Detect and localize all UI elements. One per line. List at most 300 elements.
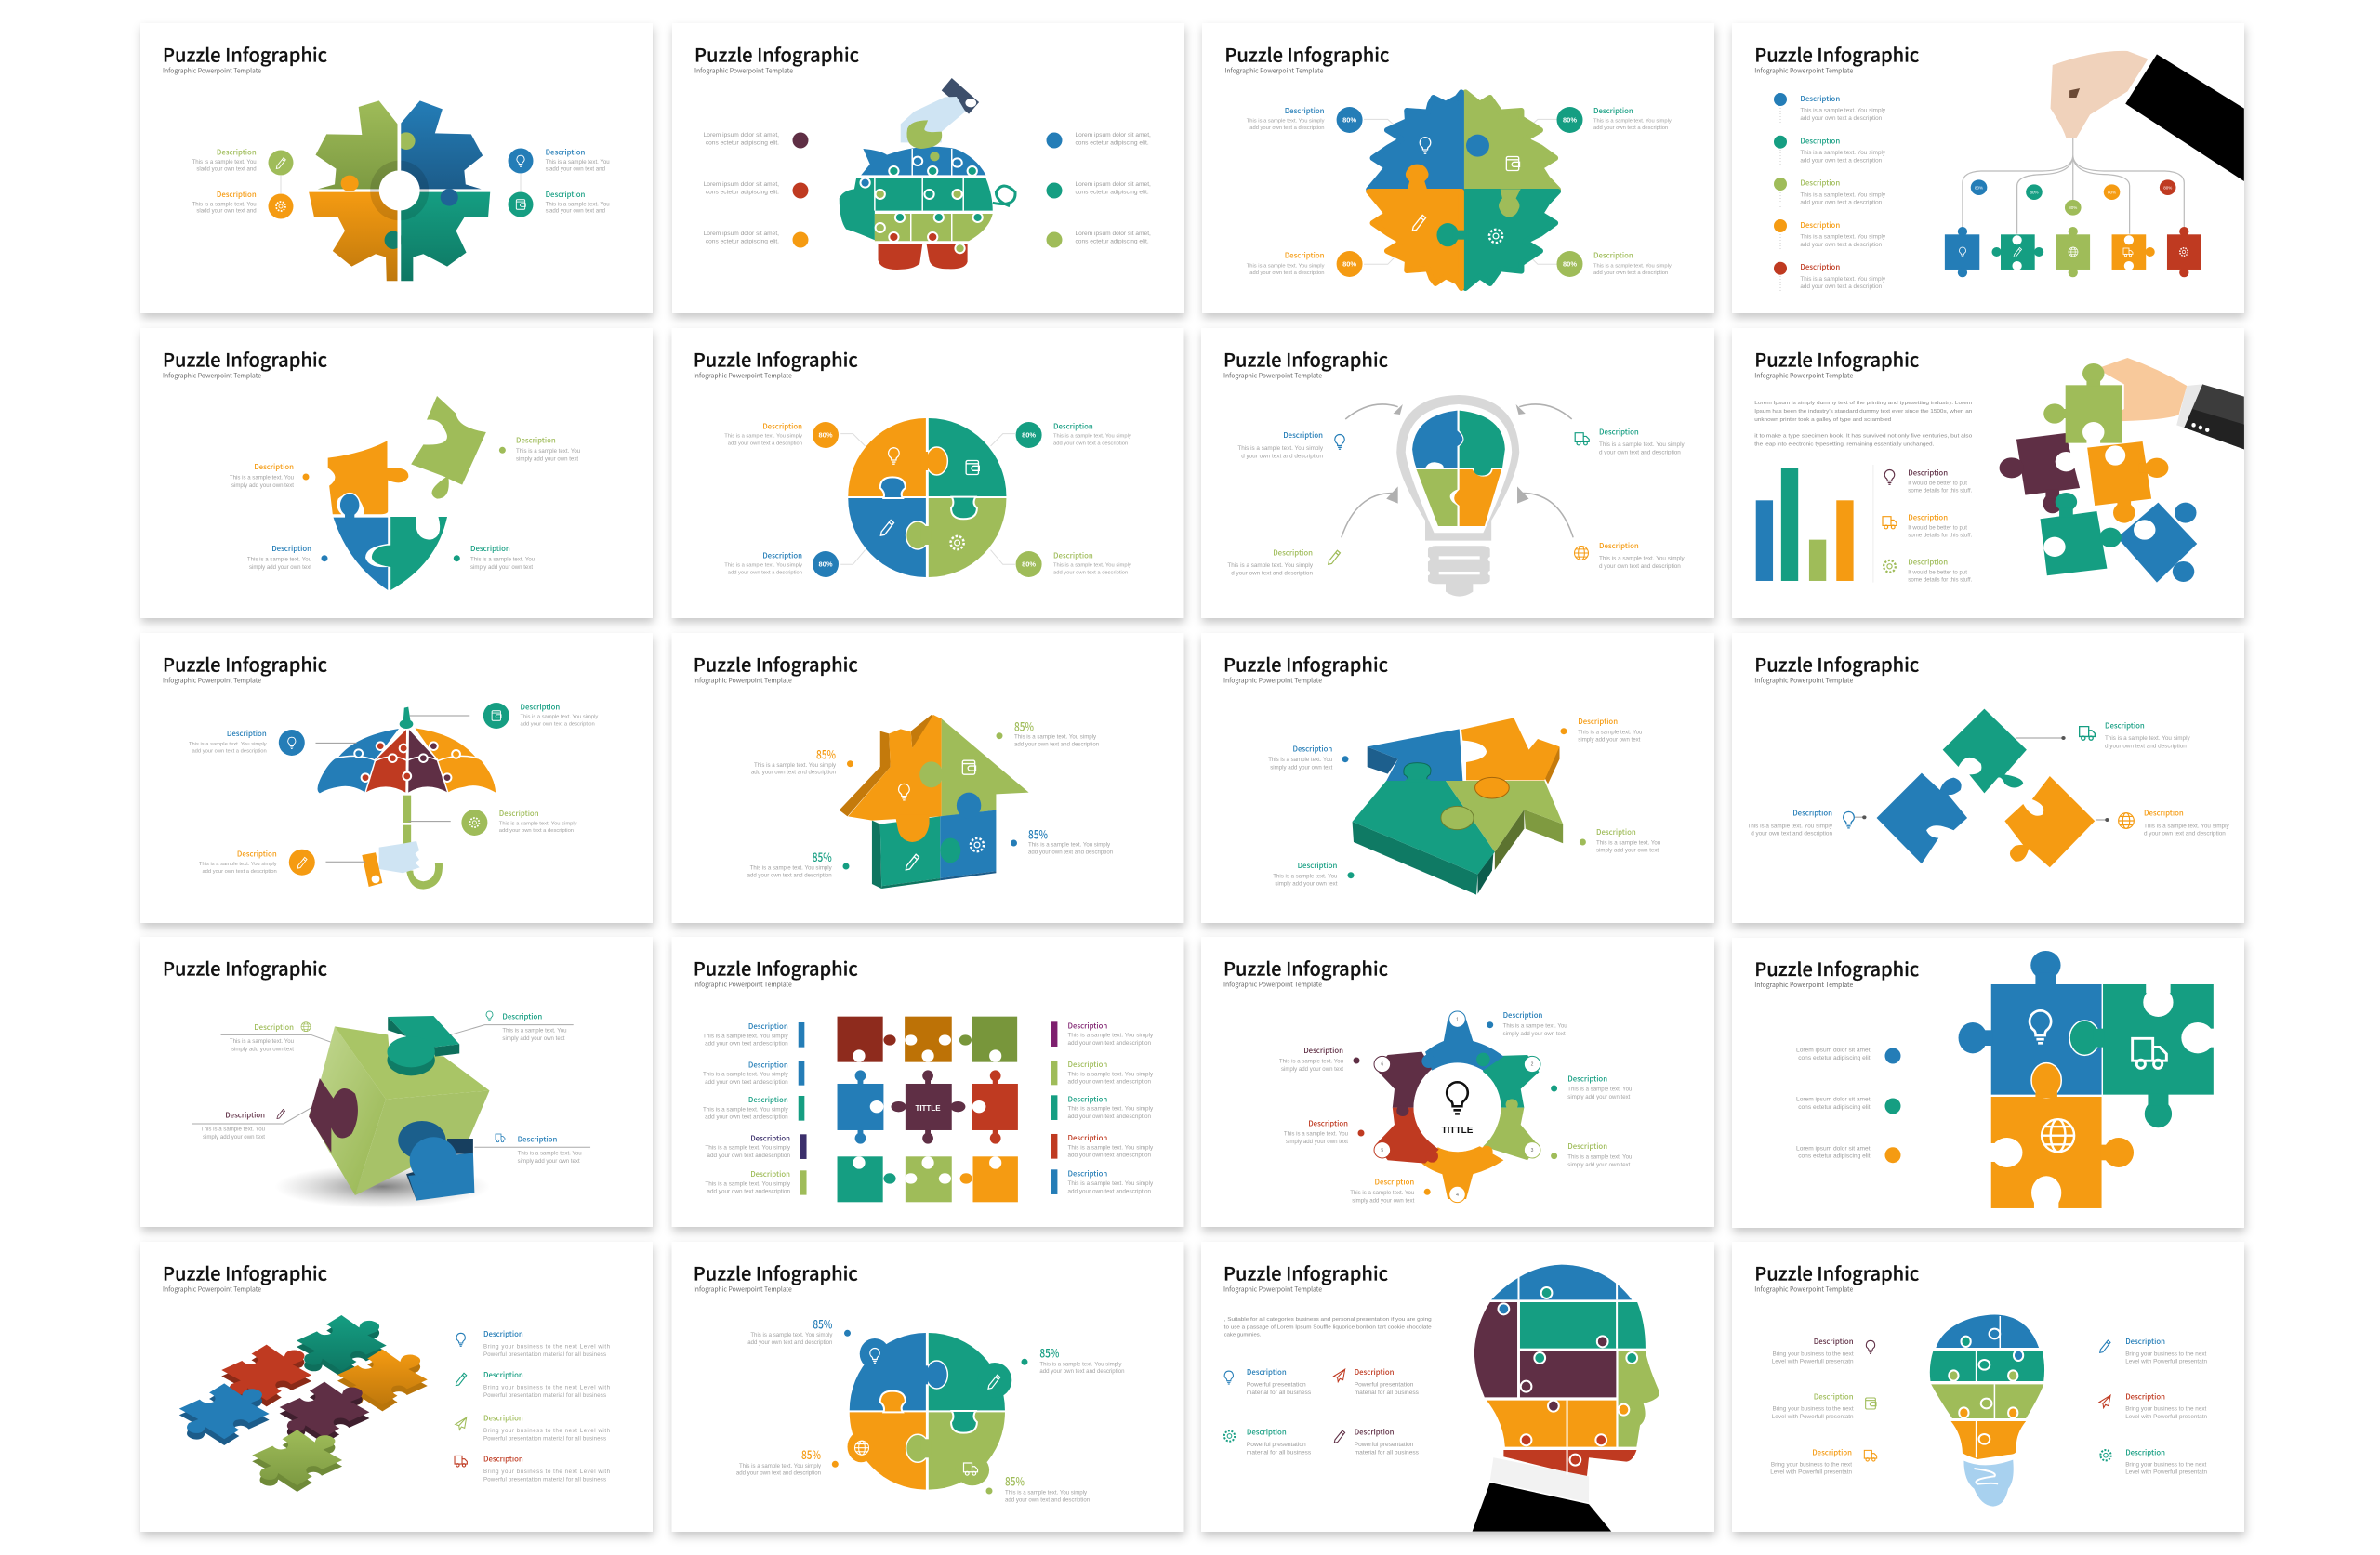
text: plum: Description	[1355, 1427, 1395, 1437]
gear puzzle graphic	[309, 100, 490, 282]
text: green: Description	[1814, 1392, 1854, 1403]
text: teal: Description	[2125, 1447, 2165, 1457]
list text: Bring your business to the next Level with	[483, 1428, 610, 1434]
left text column: add your own text andescription	[705, 1041, 788, 1048]
list text: It would be better to put	[1908, 524, 1967, 531]
legend text: Lorem ipsum dolor sit amet,	[1796, 1097, 1872, 1103]
text: orange: Description	[1578, 717, 1618, 727]
text: teal: 85%	[813, 848, 832, 865]
subtitle: Infographic Powerpoint Template	[163, 372, 261, 381]
list text: Description	[1800, 220, 1840, 231]
text: orange: This is a sample text. You simply	[199, 862, 277, 867]
panel: isometric pieces slide	[140, 1242, 653, 1532]
text: green: add your own text and description	[1005, 1496, 1090, 1503]
icons and percent badges: 80%	[1563, 260, 1577, 269]
text: blue: Level with Powerfull presentatn	[2125, 1359, 2207, 1365]
text: blue: Powerful presentation	[1247, 1382, 1306, 1389]
title: Puzzle Infographic	[1223, 651, 1388, 678]
text: green: Description	[217, 148, 257, 158]
center label: TITTLE	[915, 1104, 941, 1113]
text: blue: 85%	[1028, 825, 1048, 843]
title: Puzzle Infographic	[163, 1259, 327, 1286]
icons	[1864, 1340, 2111, 1461]
text: teal: add your own text a description	[521, 721, 595, 727]
list dots	[1774, 93, 1787, 292]
title: Puzzle Infographic	[163, 41, 327, 68]
left text column: This is a sample text. You simply	[705, 1180, 791, 1187]
text: teal: This is a sample text. You	[1273, 873, 1337, 879]
list text: Description	[1908, 557, 1948, 567]
text: blue: This is a sample text. You	[247, 556, 311, 563]
text: blue: This is a sample text. You	[518, 1151, 582, 1157]
text: green: This is a sample text. You simply	[1014, 734, 1097, 741]
text: teal: simply add your own text	[470, 564, 533, 571]
text: green: simply add your own text	[231, 1046, 294, 1052]
text: orange: Description	[237, 850, 277, 860]
text: green: Bring your business to the next	[1772, 1406, 1854, 1413]
legend text right: cons ectetur adipiscing elit.	[1075, 190, 1149, 196]
text: blue: This is a sample text. You simply	[750, 1332, 833, 1338]
right text column: This is a sample text. You simply	[1067, 1180, 1154, 1187]
text: orange: 85%	[801, 1445, 821, 1463]
text: teal: This is a sample text. You simply	[1039, 1361, 1122, 1367]
right text column: Description	[1067, 1094, 1107, 1104]
title: Puzzle Infographic	[1224, 41, 1389, 68]
text: teal: Description	[1053, 421, 1093, 431]
text: red: This is a sample text. You	[1284, 1131, 1348, 1138]
text: green: This is a sample text. You	[1596, 839, 1660, 846]
text: blue: Description	[227, 729, 267, 739]
piggy bank graphic	[840, 78, 1015, 270]
list text: Bring your business to the next Level with	[483, 1469, 610, 1475]
left text column: Description	[748, 1095, 788, 1105]
badges and icons: 80%	[1022, 560, 1036, 569]
text: blue: Description	[1293, 745, 1332, 755]
text: blue: 85%	[813, 1314, 832, 1332]
step numbers: 3	[1531, 1148, 1534, 1153]
list text: Description	[1800, 94, 1840, 104]
text: blue: add your own text and description	[747, 1339, 832, 1346]
text: orange: Description	[2144, 809, 2184, 819]
step numbers	[1381, 1017, 1534, 1198]
paragraph: cake gummies.	[1224, 1333, 1262, 1338]
left text column: This is a sample text. You simply	[703, 1072, 789, 1078]
legend text: cons ectetur adipiscing elit.	[1798, 1153, 1872, 1160]
right text column: This is a sample text. You simply	[1067, 1106, 1154, 1113]
text: orange: This is a sample text. You simply	[724, 434, 802, 440]
icons	[1224, 1369, 1345, 1443]
text: blue: material for all business	[1247, 1390, 1312, 1396]
text: blue: This is a sample text. You	[1503, 1022, 1567, 1029]
text: red: simply add your own text	[1286, 1139, 1348, 1145]
list text: Description	[1908, 512, 1948, 522]
text: blue: Bring your business to the next	[2125, 1351, 2207, 1357]
paragraph: the leap into electronic typesetting, remaining essentially unchanged.	[1754, 441, 1935, 447]
text: green: Description	[254, 1022, 294, 1033]
subtitle: Infographic Powerpoint Template	[163, 67, 261, 76]
text: orange: This is a sample text. You	[230, 474, 294, 481]
panel: head silhouette slide	[1201, 1242, 1714, 1532]
legend text left: cons ectetur adipiscing elit.	[706, 190, 779, 196]
text: orange: This is a sample text. You simply	[1247, 263, 1325, 269]
subtitle: Infographic Powerpoint Template	[694, 677, 792, 686]
text: orange: add your own text a description	[202, 869, 277, 875]
text: green: Description	[499, 809, 539, 819]
text: teal: add your own text a description	[1053, 441, 1128, 446]
list text: This is a sample text. You simply	[1800, 150, 1886, 156]
left text column: This is a sample text. You simply	[703, 1033, 789, 1039]
text: blue: This is a sample text. You simply	[1237, 445, 1324, 452]
text: blue: add your own text a description	[192, 749, 267, 755]
icons and percent badges	[1337, 107, 1582, 277]
left text column: This is a sample text. You simply	[705, 1145, 791, 1152]
text: green: Description	[516, 436, 556, 446]
text: teal: Powerful presentation	[1247, 1442, 1306, 1448]
hanging percent badges	[1975, 185, 2172, 210]
title: Puzzle Infographic	[163, 346, 327, 373]
text: orange: Level with Powerfull presentatn	[1770, 1469, 1852, 1476]
subtitle: Infographic Powerpoint Template	[163, 1285, 261, 1295]
text: green: d your own text and description	[1231, 570, 1313, 576]
bar chart	[1756, 465, 1873, 583]
diamond pieces graphic	[1855, 709, 2109, 867]
list text: Powerful presentation material for all business	[483, 1435, 606, 1442]
text: green: Description	[1596, 827, 1636, 837]
text: orange: add your own text and description	[736, 1470, 821, 1477]
text: teal: Description	[521, 703, 560, 713]
wheel graphic	[1374, 1011, 1540, 1203]
text: teal: Level with Powerfull presentatn	[2125, 1469, 2207, 1476]
text: teal: This is a sample text. You simply	[750, 864, 833, 871]
panel: cube slide	[140, 937, 653, 1227]
text: teal: This is a sample text. You simply	[521, 715, 598, 720]
text: green: simply add your own text	[1596, 848, 1659, 854]
text: teal: sladd your own text and	[546, 208, 605, 215]
panel: light bulb slide	[1201, 328, 1714, 618]
list text: It would be better to put	[1908, 480, 1967, 486]
text: orange: Description	[1285, 251, 1325, 261]
text: blue: This is a sample text. You simply	[1247, 119, 1325, 125]
text: blue: add your own text a description	[1250, 125, 1324, 131]
step numbers: 6	[1381, 1062, 1383, 1068]
title: Puzzle Infographic	[1754, 41, 1919, 68]
list text: It would be better to put	[1908, 569, 1967, 575]
text: teal: simply add your own text	[1567, 1094, 1631, 1100]
layered bulb graphic	[1930, 1315, 2044, 1507]
panel: sunburst puzzle slide	[1202, 23, 1714, 313]
piece icons	[1960, 247, 2188, 257]
hand and pieces graphic	[2000, 358, 2244, 583]
title: Puzzle Infographic	[163, 955, 327, 982]
text: plum: Description	[1303, 1046, 1343, 1056]
paragraph: to use a passage of Lorem Ipsum Souffle liquorice bonbon tart cookie chocolate	[1224, 1324, 1432, 1330]
text: teal: Description	[1298, 861, 1338, 871]
list text: add your own text a description	[1800, 157, 1883, 164]
panel: umbrella slide	[140, 633, 653, 923]
text: teal: Description	[1567, 1074, 1607, 1084]
right text column: This is a sample text. You simply	[1067, 1071, 1154, 1077]
paragraph: , Suitable for all categories business and personal presentation if you are going	[1224, 1317, 1432, 1323]
text: orange: This is a sample text. You simply	[754, 762, 837, 769]
umbrella graphic	[315, 707, 496, 890]
text: green: simply add your own text	[516, 455, 578, 463]
list text: This is a sample text. You simply	[1800, 108, 1886, 114]
list text: This is a sample text. You simply	[1800, 276, 1886, 283]
subtitle: Infographic Powerpoint Template	[694, 981, 792, 990]
subtitle: Infographic Powerpoint Template	[1754, 1285, 1853, 1295]
text: orange: d your own text and description	[1599, 563, 1681, 570]
title: Puzzle Infographic	[1223, 955, 1388, 982]
text: teal: This is a sample text. You simply	[1593, 119, 1672, 125]
text: green: This is a sample text. You	[1567, 1153, 1632, 1160]
list text: This is a sample text. You simply	[1800, 234, 1886, 241]
text: teal: This is a sample text. You	[502, 1028, 567, 1034]
list text: add your own text a description	[1800, 115, 1883, 122]
icons and percent badges: 80%	[1342, 116, 1356, 125]
list text: Description	[483, 1413, 523, 1423]
text: orange: d your own text and description	[2144, 831, 2226, 837]
icons	[2030, 1010, 2166, 1152]
text: red: Bring your business to the next	[2125, 1406, 2207, 1413]
legend text right: Lorem ipsum dolor sit amet,	[1075, 231, 1151, 237]
legend text left: Lorem ipsum dolor sit amet,	[704, 132, 779, 138]
text: blue: This is a sample text. You simply	[1747, 823, 1833, 829]
right text column: Description	[1067, 1133, 1107, 1143]
text: green: This is a sample text. You simply	[1593, 263, 1672, 269]
hanging percent badges: 80%	[2108, 190, 2116, 194]
icons	[1329, 433, 1589, 564]
list text: Description	[1800, 262, 1840, 272]
text: green: This is a sample text. You simply	[1227, 562, 1314, 569]
text: teal: simply add your own text	[1275, 881, 1338, 888]
text: blue: This is a sample text. You simply	[1028, 842, 1111, 849]
paragraph: unknown printer took a galley of type and scrambled	[1754, 417, 1891, 423]
text: blue: Description	[1285, 106, 1325, 116]
text: orange: Description	[1812, 1447, 1852, 1457]
text: orange: Description	[1375, 1178, 1414, 1188]
text: green: simply add your own text	[1567, 1162, 1631, 1168]
3D arrow graphic	[1353, 718, 1563, 895]
badges and icons	[813, 422, 1042, 577]
text: teal: simply add your own text	[502, 1035, 565, 1042]
text: blue: Description	[1792, 809, 1832, 819]
legend dots	[1885, 1048, 1900, 1163]
text: plum: material for all business	[1355, 1449, 1420, 1456]
text: red: Description	[1355, 1367, 1395, 1377]
text: orange: simply add your own text	[1352, 1197, 1415, 1205]
text: blue: Description	[1283, 430, 1323, 441]
text: teal: Description	[502, 1012, 542, 1022]
bumpy circle graphic	[848, 1333, 1012, 1490]
text: plum: This is a sample text. You	[201, 1127, 265, 1133]
text: blue: simply add your own text	[518, 1158, 580, 1165]
text: red: material for all business	[1355, 1390, 1420, 1396]
text: green: This is a sample text. You simply	[1053, 563, 1131, 569]
title: Puzzle Infographic	[1754, 1259, 1919, 1286]
text: plum: Bring your business to the next	[1772, 1351, 1854, 1357]
left text column: add your own text andescription	[705, 1114, 788, 1121]
list text: some details for this stuff.	[1908, 487, 1973, 494]
text: teal: d your own text and description	[2105, 743, 2187, 749]
badges and icons: 80%	[1022, 431, 1036, 440]
text: blue: Description	[271, 544, 311, 554]
subtitle: Infographic Powerpoint Template	[1754, 67, 1853, 76]
subtitle: Infographic Powerpoint Template	[1223, 1285, 1322, 1295]
list text: Bring your business to the next Level with	[483, 1344, 610, 1351]
text: orange: This is a sample text. You	[1578, 729, 1642, 735]
legend text left: Lorem ipsum dolor sit amet,	[704, 181, 779, 188]
legend text: cons ectetur adipiscing elit.	[1798, 1104, 1872, 1111]
text: teal: This is a sample text. You simply	[2105, 735, 2190, 742]
dots	[1354, 1021, 1557, 1195]
subtitle: Infographic Powerpoint Template	[163, 677, 261, 686]
list text: Description	[483, 1329, 523, 1339]
text: green: add your own text a description	[1053, 570, 1128, 575]
text: blue: simply add your own text	[1270, 764, 1333, 771]
panel: six spoke wheel slide	[1201, 937, 1714, 1227]
text: blue: add your own text a description	[728, 570, 802, 575]
text: orange: This is a sample text. You simply	[1599, 556, 1685, 562]
icons and dots	[842, 732, 1017, 870]
list text: add your own text a description	[1800, 200, 1883, 206]
panel: layered bulb slide	[1732, 1242, 2244, 1532]
legend text right: Lorem ipsum dolor sit amet,	[1075, 132, 1151, 138]
step numbers: 1	[1456, 1017, 1459, 1022]
head graphic	[1473, 1265, 1659, 1532]
hanging percent badges: 80%	[1975, 185, 1983, 190]
text: orange: This is a sample text. You	[192, 201, 257, 207]
text: blue: sladd your own text and	[546, 165, 605, 172]
text: blue: simply add your own text	[249, 564, 311, 571]
text: blue: Description	[2125, 1337, 2165, 1347]
subtitle: Infographic Powerpoint Template	[1754, 372, 1853, 381]
legend text left: Lorem ipsum dolor sit amet,	[704, 231, 779, 237]
text: plum: simply add your own text	[203, 1134, 265, 1140]
paragraph: Ipsum has been the industry's standard dummy text ever since the 1500s, when an	[1754, 409, 1972, 415]
big puzzle graphic	[1959, 951, 2215, 1209]
text: green: add your own text and description	[1014, 742, 1099, 748]
right text column: Description	[1067, 1169, 1107, 1179]
text: plum: simply add your own text	[1281, 1066, 1343, 1073]
right text column: This is a sample text. You simply	[1067, 1144, 1154, 1151]
legend text: cons ectetur adipiscing elit.	[1798, 1055, 1872, 1061]
subtitle: Infographic Powerpoint Template	[1224, 67, 1324, 76]
step numbers: 2	[1531, 1062, 1534, 1068]
panel: circle puzzle slide	[671, 328, 1184, 618]
panel: hand hanging pieces slide	[1732, 23, 2244, 313]
text: green: This is a sample text. You simply	[1005, 1490, 1088, 1496]
right text column: add your own text andescription	[1067, 1114, 1152, 1120]
text: teal: Bring your business to the next	[2125, 1461, 2207, 1468]
title: Puzzle Infographic	[1754, 955, 1919, 982]
subtitle: Infographic Powerpoint Template	[1223, 981, 1322, 990]
list text: some details for this stuff.	[1908, 532, 1973, 538]
text: teal: This is a sample text. You	[470, 556, 535, 563]
text: orange: This is a sample text. You simply	[2144, 823, 2229, 829]
panel: nine piece grid slide	[671, 937, 1184, 1227]
puzzle grid	[799, 1017, 1057, 1202]
subtitle: Infographic Powerpoint Template	[1223, 372, 1322, 381]
legend text right: cons ectetur adipiscing elit.	[1075, 239, 1149, 245]
list icons	[1883, 470, 1897, 573]
subtitle: Infographic Powerpoint Template	[1754, 981, 1853, 990]
text: blue: This is a sample text. You simply	[724, 563, 802, 569]
icons and percent badges: 80%	[1342, 260, 1356, 269]
right text column: Description	[1067, 1060, 1107, 1070]
text: orange: add your own text and description	[751, 770, 836, 776]
list text: some details for this stuff.	[1908, 576, 1973, 583]
badges and icons: 80%	[818, 560, 833, 569]
text: green: This is a sample text. You	[230, 1038, 294, 1045]
list text: Powerful presentation material for all business	[483, 1476, 606, 1483]
text: orange: sladd your own text and	[196, 208, 257, 215]
text: orange: Description	[217, 190, 257, 200]
hanging percent badges: 80%	[2069, 205, 2077, 210]
isometric pieces graphic	[179, 1315, 428, 1492]
text: teal: Description	[546, 190, 586, 200]
text: teal: add your own text a description	[1593, 125, 1668, 131]
text: green: Description	[1273, 547, 1313, 558]
list text: Bring your business to the next Level with	[483, 1385, 610, 1391]
text: plum: Powerful presentation	[1355, 1442, 1414, 1448]
title: Puzzle Infographic	[1223, 346, 1388, 373]
text: teal: material for all business	[1247, 1449, 1312, 1456]
text: orange: add your own text a description	[728, 441, 802, 446]
panel: gear puzzle slide	[140, 23, 653, 313]
panel: 3D house slide	[671, 633, 1184, 923]
text: orange: Bring your business to the next	[1771, 1461, 1852, 1468]
subtitle: Infographic Powerpoint Template	[694, 1285, 792, 1295]
text: blue: This is a sample text. You	[1268, 757, 1332, 763]
title: Puzzle Infographic	[1754, 651, 1919, 678]
legend text right: Lorem ipsum dolor sit amet,	[1075, 181, 1151, 188]
hanging percent badges: 80%	[2163, 185, 2172, 190]
right text column: add your own text andescription	[1067, 1153, 1152, 1159]
center bulb icon	[1447, 1082, 1468, 1114]
text: green: sladd your own text and	[196, 165, 257, 172]
text: blue: Description	[518, 1134, 558, 1144]
text: teal: Description	[2105, 720, 2145, 731]
circle puzzle graphic	[840, 418, 1015, 577]
subtitle: Infographic Powerpoint Template	[694, 67, 793, 76]
left text column: Description	[750, 1133, 790, 1143]
legend text right: cons ectetur adipiscing elit.	[1075, 140, 1149, 147]
title: Puzzle Infographic	[694, 955, 858, 982]
text: red: Description	[2125, 1392, 2165, 1403]
text: green: This is a sample text. You simply	[499, 821, 577, 826]
subtitle: Infographic Powerpoint Template	[1223, 677, 1322, 686]
right text column: add your own text andescription	[1067, 1040, 1152, 1047]
text: green: Description	[1567, 1141, 1607, 1152]
text: blue: This is a sample text. You simply	[189, 742, 267, 747]
list text: add your own text a description	[1800, 283, 1883, 290]
list text: Description	[1908, 468, 1948, 478]
left text column: add your own text andescription	[707, 1189, 790, 1195]
icons and percent badges: 80%	[1563, 116, 1577, 125]
callout icons	[268, 149, 534, 219]
text: plum: Description	[225, 1111, 265, 1121]
text: red: Level with Powerfull presentatn	[2125, 1414, 2207, 1420]
text: blue: d your own text and description	[1751, 831, 1832, 837]
text: green: Level with Powerfull presentatn	[1772, 1414, 1854, 1420]
text: green: Description	[1053, 550, 1093, 560]
text: teal: 85%	[1039, 1343, 1059, 1361]
right text column: This is a sample text. You simply	[1067, 1033, 1154, 1039]
panel: hand with pieces and bars slide	[1732, 328, 2244, 618]
badges	[279, 703, 509, 876]
text: green: 85%	[1005, 1472, 1025, 1490]
legend text left: cons ectetur adipiscing elit.	[706, 239, 779, 245]
